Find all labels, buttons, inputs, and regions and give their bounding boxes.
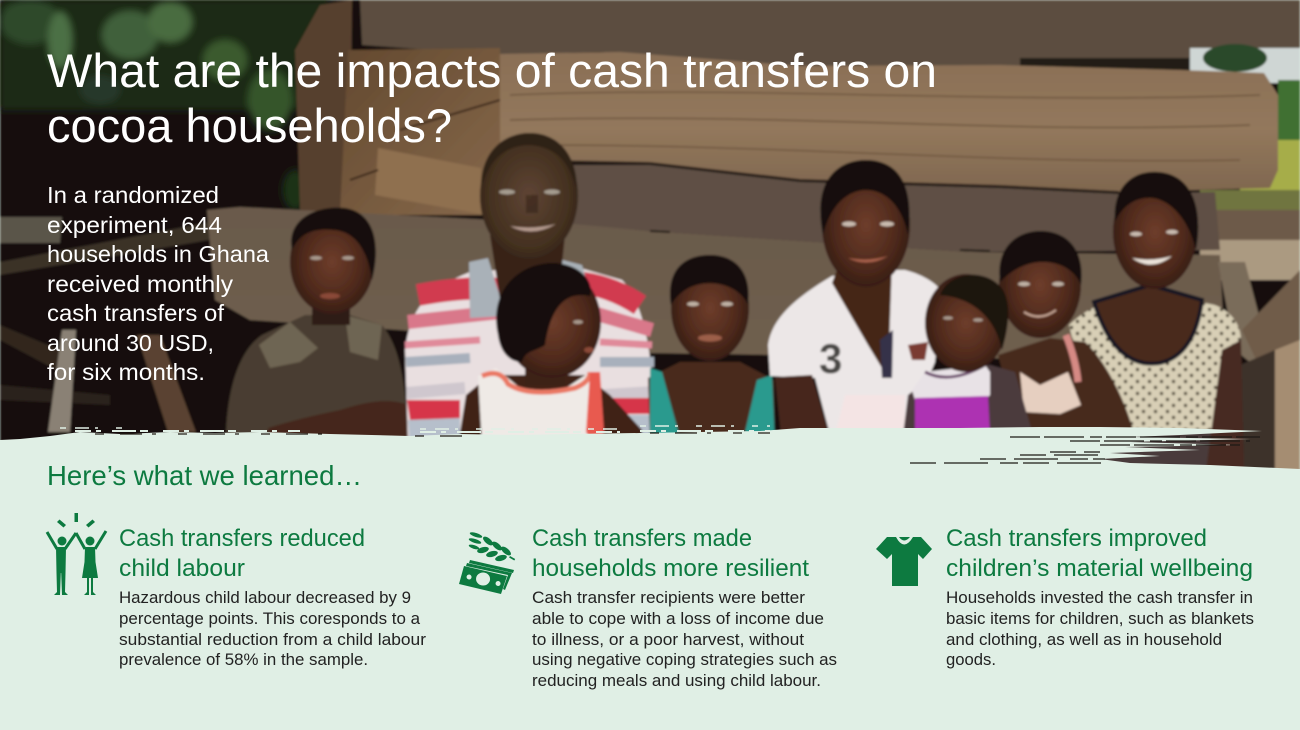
body text: able to cope with a loss of income due — [532, 610, 824, 628]
body text: basic items for children, such as blankets — [946, 610, 1254, 628]
panel: resilience finding — [459, 525, 837, 690]
intro paragraph — [47, 182, 269, 385]
intro paragraph: households in Ghana — [47, 241, 269, 267]
title — [47, 44, 937, 152]
torn brush edge of the lower panel — [0, 426, 1300, 730]
person: father in striped shirt — [405, 133, 655, 445]
body text: reducing meals and using child labour. — [532, 672, 821, 690]
body text: and clothing, as well as in household — [946, 631, 1222, 649]
right timbers — [1218, 262, 1268, 372]
right side: sky, greenery and wall — [1190, 48, 1300, 83]
heading: child labour — [119, 555, 245, 582]
body text: Cash transfer recipients were better — [532, 589, 806, 607]
person: girl with pink straps — [998, 231, 1133, 430]
body text: substantial reduction from a child labour — [119, 631, 427, 649]
icon: wheat and banknotes — [459, 531, 515, 594]
person: woman in white polo — [768, 160, 942, 445]
timber: left stack — [340, 48, 500, 215]
body text — [946, 589, 1254, 669]
intro paragraph: In a randomized — [47, 182, 219, 208]
body text — [532, 589, 837, 690]
panel: child labour finding — [47, 513, 427, 669]
heading — [946, 525, 1253, 582]
intro paragraph: around 30 USD, — [47, 330, 214, 356]
title: cocoa households? — [47, 99, 452, 152]
heading: Cash transfers made — [532, 525, 752, 552]
foliage at top left — [0, 0, 330, 210]
timber: log behind foliage — [295, 0, 352, 215]
intro paragraph: received monthly — [47, 271, 234, 297]
section heading: Here’s what we learned… — [47, 460, 362, 491]
body text — [119, 589, 427, 669]
body text: percentage points. This coresponds to a — [119, 610, 421, 628]
heading: households more resilient — [532, 555, 809, 582]
icon: two children with raised arms — [47, 513, 106, 595]
icon: t-shirt — [876, 537, 932, 586]
person: boy on left — [226, 208, 408, 445]
person: toddler in magenta — [903, 274, 1033, 435]
title: What are the impacts of cash transfers on — [47, 44, 937, 97]
body text: Hazardous child labour decreased by 9 — [119, 589, 411, 607]
heading: Cash transfers improved — [946, 525, 1207, 552]
body text: Households invested the cash transfer in — [946, 589, 1253, 607]
intro paragraph: cash transfers of — [47, 300, 225, 326]
photo: cocoa family in front of stacked timber — [0, 0, 1300, 475]
left yard: dark posts — [0, 217, 62, 243]
timber: big plank — [500, 52, 1278, 192]
body text: goods. — [946, 651, 996, 669]
photo background: dark shed — [0, 0, 1300, 475]
heading — [119, 525, 365, 582]
panel: material wellbeing finding — [876, 525, 1254, 669]
person: woman in white polo: 3 — [819, 335, 842, 382]
legs below dress on right — [1100, 420, 1240, 470]
heading — [532, 525, 809, 582]
intro paragraph: experiment, 644 — [47, 212, 222, 238]
timber: shadow gap — [1020, 58, 1190, 70]
heading: Cash transfers reduced — [119, 525, 365, 552]
body text: using negative coping strategies such as — [532, 651, 837, 669]
body text: prevalence of 58% in the sample. — [119, 651, 368, 669]
timber: middle plank — [573, 165, 1220, 252]
person: girl in teal — [648, 255, 775, 445]
heading: children’s material wellbeing — [946, 555, 1253, 582]
body text: to illness, or a poor harvest, without — [532, 631, 804, 649]
timber: top plank — [360, 0, 1300, 80]
intro paragraph: for six months. — [47, 359, 205, 385]
timber: lower plank — [207, 207, 1225, 360]
person: toddler in white and pink dress — [458, 263, 642, 445]
person: right-hand girl in dotted dress — [1069, 172, 1244, 470]
